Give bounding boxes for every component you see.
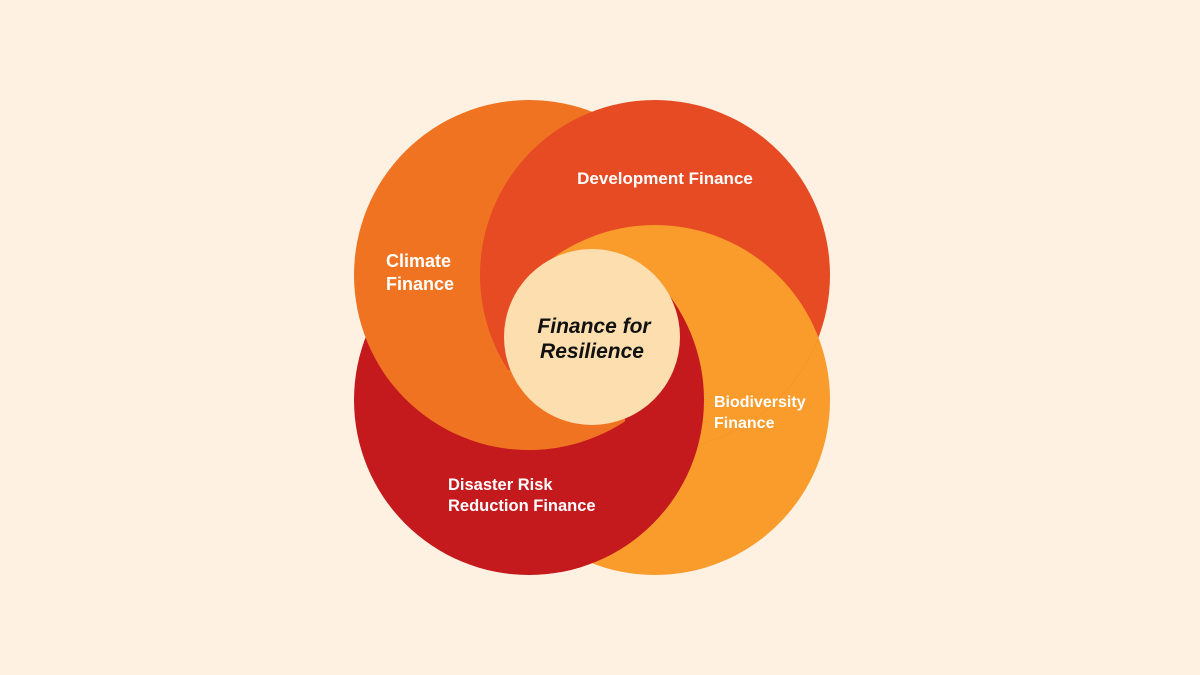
circle: climate finance	[354, 100, 704, 450]
center title: Resilience	[540, 340, 644, 363]
label: biodiversity finance: Finance	[714, 415, 775, 432]
circle: biodiversity overlap	[551, 225, 818, 444]
label: climate finance: Finance	[386, 274, 454, 294]
diagram: overlapping circles	[354, 100, 830, 575]
circle: disaster risk reduction finance	[354, 225, 704, 575]
center circle	[504, 249, 680, 425]
circle: disaster overlap	[560, 296, 704, 572]
circle: development finance	[480, 100, 830, 450]
label: climate finance: Climate	[386, 251, 451, 271]
center title: Finance for	[537, 315, 652, 338]
label: disaster risk reduction finance: Disaster Risk	[448, 476, 553, 494]
label: biodiversity finance: Biodiversity	[714, 394, 806, 411]
circle: biodiversity finance	[480, 225, 830, 575]
circle: climate overlap	[382, 370, 625, 450]
label: development finance: Development Finance	[577, 169, 753, 188]
label: disaster risk reduction finance: Reduction Finance	[448, 497, 596, 515]
